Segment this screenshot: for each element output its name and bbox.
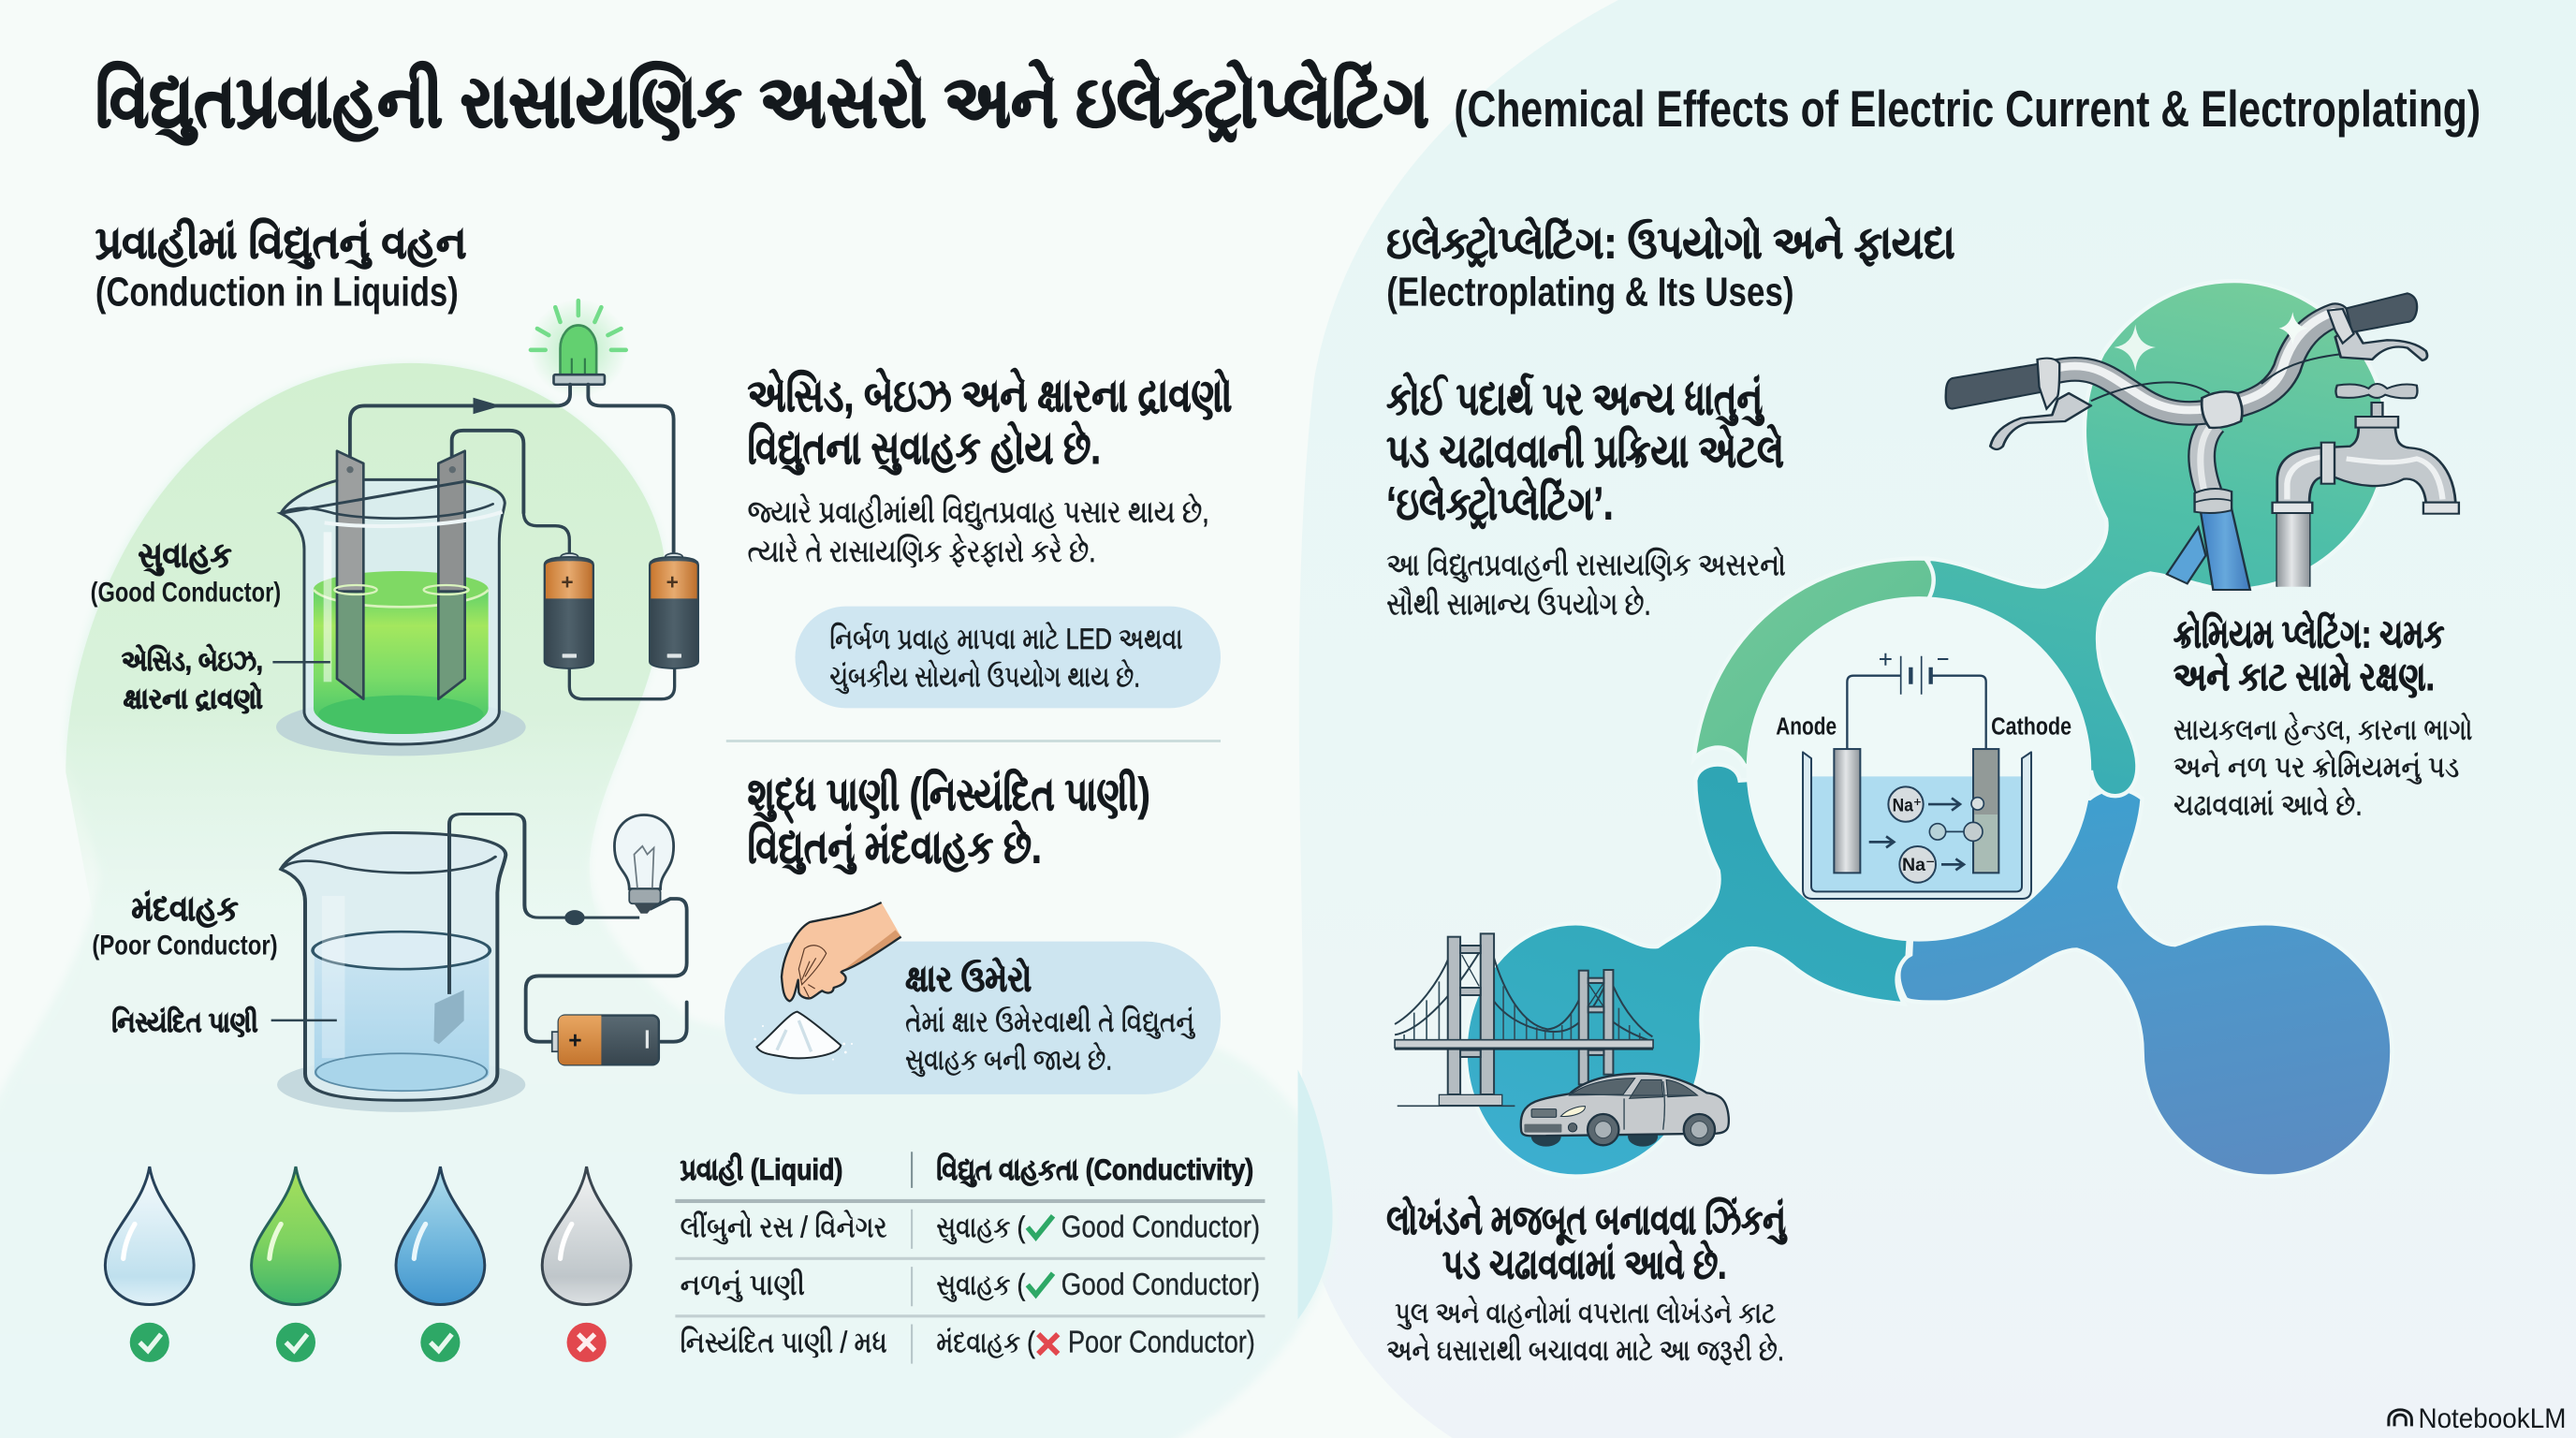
towers bbox=[1448, 933, 1613, 1094]
heading: electroplating and uses: ઇલેક્ટ્રોપ્લેટિંગ: ઉપયોગો અને ફાયદા bbox=[1386, 217, 1955, 269]
battery left bbox=[545, 553, 593, 668]
battery right bbox=[650, 553, 698, 668]
heading: conduction in liquids: પ્રવાહીમાં વિદ્યુતનું વહન bbox=[95, 219, 466, 270]
cathode bbox=[1973, 749, 1998, 873]
faucet body bbox=[2277, 421, 2455, 503]
text block: zinc plating: અને ઘસારાથી બચાવવા માટે આ જરૂરી છે. bbox=[1386, 1333, 1784, 1367]
text block: acids bases conductors: એસિડ, બેઇઝ અને ક્ષારના દ્રાવણો bbox=[748, 368, 1232, 421]
circuit with battery symbol bbox=[1847, 653, 1986, 749]
wires to batteries bbox=[523, 512, 675, 699]
grip right bbox=[2347, 293, 2417, 332]
text block: acids bases conductors: ત્યારે તે રાસાયણિક ફેરફારો કરે છે. bbox=[748, 535, 1096, 569]
callout: add salt: સુવાહક બની જાય છે. bbox=[905, 1043, 1112, 1077]
text block: acids bases conductors: જ્યારે પ્રવાહીમાંથી વિદ્યુતપ્રવાહ પસાર થાય છે, bbox=[748, 495, 1209, 530]
callout: add salt: ક્ષાર ઉમેરો bbox=[905, 957, 1032, 999]
centre circle bbox=[1747, 596, 2091, 942]
arrows bbox=[1869, 798, 1964, 870]
icon: clear drop bbox=[105, 1167, 194, 1304]
label: good conductor bbox=[91, 536, 281, 608]
table row: lemon juice: Good Conductor) bbox=[1061, 1211, 1260, 1245]
label: anode: Anode bbox=[1776, 712, 1837, 740]
ions: Na⁺ bbox=[1893, 797, 1922, 816]
beaker body bbox=[281, 832, 505, 1100]
ring segment: upper left green bbox=[1693, 559, 1934, 769]
label: poor conductor: (Poor Conductor) bbox=[92, 931, 278, 961]
icon: check bbox=[420, 1323, 460, 1362]
blue frame tubes bbox=[2167, 506, 2250, 590]
wire to bulb bbox=[449, 814, 639, 994]
grip left bbox=[1946, 363, 2052, 409]
cable bbox=[2091, 354, 2341, 401]
label: cathode: Cathode bbox=[1991, 712, 2071, 740]
tank bbox=[1803, 752, 2031, 899]
beaker and batteries detail bbox=[276, 451, 698, 756]
beaker body bbox=[281, 479, 505, 744]
bridge hangers bbox=[1404, 981, 1640, 1040]
label: good conductor: (Good Conductor) bbox=[91, 577, 281, 608]
text block: acids bases conductors: વિદ્યુતના સુવાહક હોય છે. bbox=[748, 420, 1101, 476]
car doors bbox=[1570, 1081, 1697, 1130]
ions bbox=[1888, 786, 1983, 883]
blob: upper right teal bbox=[1919, 281, 2387, 796]
illustration: bicycle handlebar bbox=[1946, 293, 2427, 590]
illustration: silver car bbox=[1521, 1074, 1729, 1147]
battery left: + bbox=[561, 569, 574, 594]
text block: pure water poor conductor: શુદ્ધ પાણી (નિસ્યંદિત પાણી) bbox=[748, 768, 1150, 824]
bar clamp bbox=[2202, 391, 2242, 428]
label: poor conductor bbox=[92, 889, 278, 961]
anode bbox=[1834, 749, 1860, 873]
battery horizontal: + bbox=[568, 1029, 582, 1054]
illustration: poor conductor circuit bbox=[277, 814, 687, 1112]
car body bbox=[1521, 1074, 1729, 1136]
table row: distilled water honey bbox=[681, 1325, 1255, 1359]
illustration: electroplating cell bbox=[1803, 653, 2031, 899]
table row: tap water bbox=[681, 1268, 1260, 1302]
electrodes bbox=[337, 451, 465, 699]
stem bbox=[2201, 424, 2213, 492]
text block: electroplating definition: સૌથી સામાન્ય ઉપયોગ છે. bbox=[1386, 586, 1651, 622]
table row: distilled water honey: નિસ્યંદિત પાણી / મધ bbox=[681, 1325, 887, 1358]
droplets row bbox=[105, 1167, 631, 1362]
text block: zinc plating: પુલ અને વાહનોમાં વપરાતા લોખંડને કાટ bbox=[1395, 1296, 1776, 1329]
table row: tap water: Good Conductor) bbox=[1061, 1268, 1260, 1302]
table row: tap water: નળનું પાણી bbox=[681, 1268, 805, 1301]
table: liquid conductivity bbox=[675, 1152, 1265, 1364]
illustration: suspension bridge bbox=[1395, 933, 1653, 1106]
table row: lemon juice bbox=[681, 1211, 1260, 1245]
ions: Na⁻ bbox=[1902, 856, 1935, 875]
label: distilled water: નિસ્યંદિત પાણી bbox=[111, 1006, 258, 1038]
beaker shadow bbox=[277, 1057, 525, 1112]
text block: pure water poor conductor: વિદ્યુતનું મંદવાહક છે. bbox=[748, 820, 1042, 874]
deck bbox=[1395, 1040, 1653, 1048]
far wheels bbox=[1531, 1126, 1658, 1147]
table header: પ્રવાહી (Liquid) bbox=[681, 1152, 842, 1186]
icon: check bbox=[130, 1323, 169, 1362]
text block: electroplating definition: કોઈ પદાર્થ પર અન્ય ધાતુનું bbox=[1386, 372, 1764, 426]
heading: conduction in liquids bbox=[95, 219, 466, 315]
label: acid base salt solutions: એસિડ, બેઇઝ, bbox=[122, 644, 263, 677]
text block: acids bases conductors bbox=[748, 368, 1232, 569]
blob: lower left teal bbox=[1466, 765, 1919, 1177]
callout: LED or magnetic needle: ચુંબકીય સોયનો ઉપયોગ થાય છે. bbox=[829, 660, 1140, 694]
text block: chromium plating bbox=[2174, 610, 2472, 821]
table row: distilled water honey: મંદવાહક ( bbox=[936, 1325, 1035, 1358]
brake lever left bbox=[1990, 393, 2091, 449]
icon: hand pinching salt bbox=[782, 902, 901, 1001]
illustration: good conductor circuit bbox=[276, 299, 698, 756]
glass outline bbox=[281, 832, 505, 1100]
beaker shadow bbox=[276, 698, 526, 756]
glass outline bbox=[281, 479, 505, 744]
title: વિદ્યુતપ્રવાહની રાસાયણિક અસરો અને ઇલેક્ટ્રોપ્લેટિંગ bbox=[95, 59, 1429, 145]
text block: electroplating definition: ‘ઇલેક્ટ્રોપ્લેટિંગ’. bbox=[1386, 477, 1613, 530]
text block: electroplating definition bbox=[1386, 372, 1786, 622]
circuit wires bbox=[350, 385, 674, 552]
brake lever right bbox=[2335, 325, 2427, 360]
table header: વિદ્યુત વાહકતા (Conductivity) bbox=[936, 1152, 1253, 1188]
table row: distilled water honey: Poor Conductor) bbox=[1068, 1325, 1255, 1359]
label: poor conductor: મંદવાહક bbox=[131, 889, 239, 928]
battery right: + bbox=[666, 569, 679, 594]
table header bbox=[681, 1152, 1253, 1188]
text block: zinc plating: પડ ચઢાવવામાં આવે છે. bbox=[1442, 1240, 1727, 1287]
text block: pure water poor conductor bbox=[748, 768, 1150, 874]
faucet pipe bbox=[2277, 503, 2309, 587]
icon: green LED bbox=[529, 299, 627, 398]
icon: check bbox=[276, 1323, 315, 1362]
icon: salt pile bbox=[754, 1012, 853, 1061]
handlebar tube bbox=[2054, 312, 2335, 413]
icon: gray drop bbox=[542, 1167, 631, 1304]
heading: electroplating and uses bbox=[1386, 217, 1955, 315]
callout: add salt: તેમાં ક્ષાર ઉમેરવાથી તે વિદ્યુતનું bbox=[905, 1005, 1195, 1039]
callout: LED or magnetic needle bbox=[795, 607, 1221, 708]
icon: cross bbox=[567, 1323, 607, 1362]
table row: tap water: સુવાહક ( bbox=[936, 1268, 1026, 1301]
table row: lemon juice: લીંબુનો રસ / વિનેગર bbox=[681, 1211, 887, 1244]
bridge cables bbox=[1395, 950, 1652, 1042]
title bbox=[95, 59, 2481, 145]
base bbox=[1439, 1094, 1502, 1106]
wheels bbox=[1588, 1114, 1715, 1145]
water bbox=[313, 896, 490, 1091]
collar and spout tip bbox=[2273, 503, 2312, 513]
text block: chromium plating: અને નળ પર ક્રોમિયમનું પડ bbox=[2174, 750, 2459, 785]
table row: lemon juice: સુવાહક ( bbox=[936, 1211, 1026, 1244]
text block: electroplating definition: આ વિદ્યુતપ્રવાહની રાસાયણિક અસરનો bbox=[1386, 548, 1786, 582]
sparkles bbox=[2114, 325, 2156, 372]
label: acid base salt solutions: ક્ષારના દ્રાવણો bbox=[124, 682, 263, 714]
icon: green drop bbox=[252, 1167, 340, 1304]
callout: LED or magnetic needle: નિર્બળ પ્રવાહ માપવા માટે LED અથવા bbox=[829, 622, 1183, 655]
process diagram: ring and blobs bbox=[1466, 281, 2392, 1177]
car windows bbox=[1570, 1078, 1697, 1098]
text block: chromium plating: સાયકલના હેન્ડલ, કારના ભાગો bbox=[2174, 712, 2472, 746]
car front details bbox=[1524, 1107, 1585, 1133]
heading: conduction in liquids: (Conduction in Liquids) bbox=[95, 269, 459, 315]
text block: zinc plating bbox=[1386, 1196, 1788, 1367]
text block: chromium plating: ચઢાવવામાં આવે છે. bbox=[2174, 787, 2363, 821]
valve handle bbox=[2372, 403, 2382, 417]
beaker and water detail bbox=[277, 814, 639, 1112]
battery horizontal bbox=[552, 1016, 659, 1064]
text block: chromium plating: ક્રોમિયમ પ્લેટિંગ: ચમક bbox=[2174, 610, 2445, 655]
text block: zinc plating: લોખંડને મજબૂત બનાવવા ઝિંકનું bbox=[1386, 1196, 1788, 1245]
illustration: chrome faucet bbox=[2273, 384, 2459, 587]
blob: lower right blue bbox=[1898, 769, 2392, 1177]
electrolyte bbox=[1811, 776, 2022, 891]
callout: add salt bbox=[724, 902, 1221, 1094]
heading: electroplating and uses: (Electroplating & Its Uses) bbox=[1386, 269, 1794, 315]
electrode bbox=[434, 990, 464, 1044]
label: good conductor: સુવાહક bbox=[138, 536, 232, 576]
icon: light bulb bbox=[614, 814, 674, 914]
text block: electroplating definition: પડ ચઢાવવાની પ્રક્રિયા એટલે bbox=[1386, 424, 1784, 477]
green liquid bbox=[314, 532, 489, 734]
circuit wires bbox=[526, 899, 687, 1042]
text block: chromium plating: અને કાટ સામે રક્ષણ. bbox=[2174, 653, 2435, 698]
icon: blue drop bbox=[396, 1167, 485, 1304]
notebooklm logo: NotebookLM bbox=[2418, 1403, 2566, 1434]
label: acid base salt solutions bbox=[122, 644, 330, 714]
